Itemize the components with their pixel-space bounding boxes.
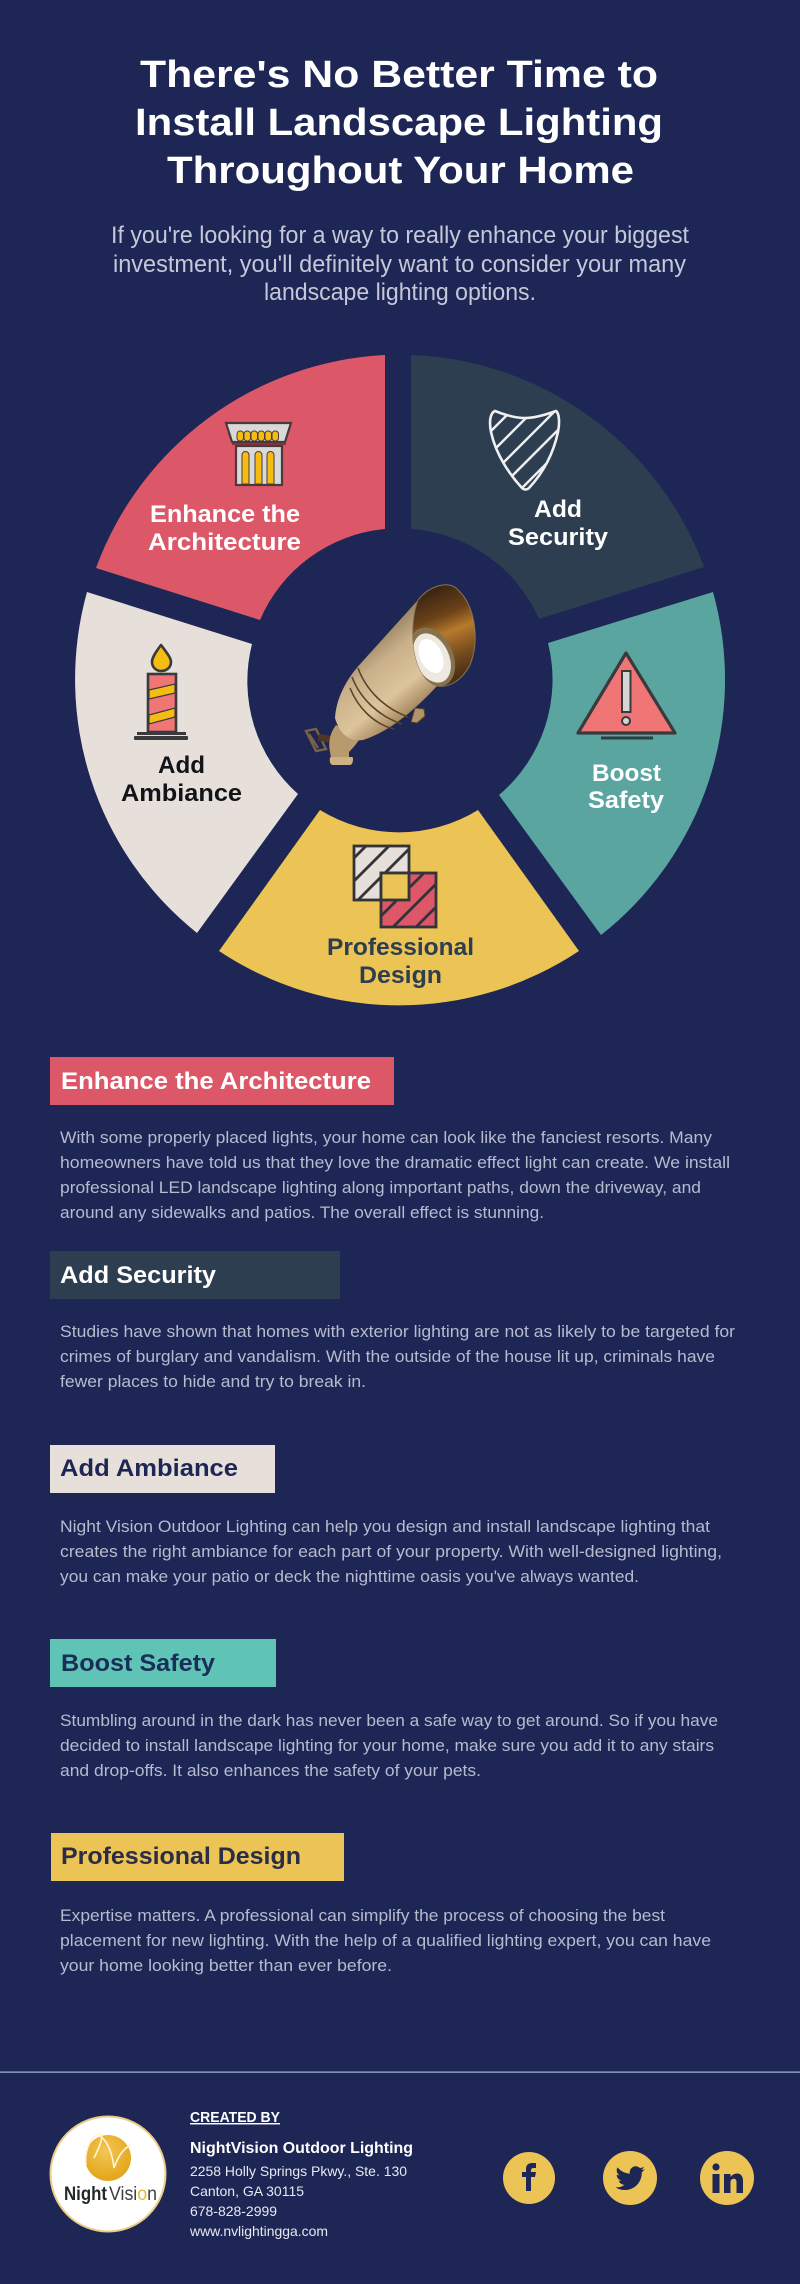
credits: www.nvlightingga.com [189,2223,328,2239]
credits: NightVision Outdoor Lighting [190,2140,413,2157]
label: enhance the architecture [148,501,301,556]
heading bar: Professional Design [61,1843,301,1870]
label: enhance the architecture: Architecture [148,529,301,556]
paragraph [60,1129,730,1222]
icon: column [226,423,291,485]
credits: CREATED BY [190,2110,280,2126]
paragraph: around any sidewalks and patios. The overall effect is stunning. [60,1204,544,1222]
segment: add ambiance [75,592,298,933]
label: add security: Security [508,524,609,551]
heading bar [50,1445,275,1493]
segment: professional design [219,810,579,1005]
icon: shield [488,410,560,491]
paragraph: fewer places to hide and try to break in. [60,1373,366,1391]
paragraph: professional LED landscape lighting along important paths, down the driveway, and [60,1179,701,1197]
label: boost safety: Safety [588,787,665,814]
paragraph: placement for new lighting. With the help of a qualified lighting expert, you can have [60,1932,711,1950]
logo: Night Vision [50,2116,166,2232]
title: There's No Better Time to [140,54,658,96]
paragraph: decided to install landscape lighting for your home, make sure you add it to any stairs [60,1737,714,1755]
heading bar [51,1833,344,1881]
label: professional design: Design [359,962,442,989]
paragraph [60,1712,718,1780]
icon: warning triangle [578,653,675,740]
image: brass landscape spotlight [306,585,475,765]
heading bar: Enhance the Architecture [61,1068,371,1095]
intro text: If you're looking for a way to really enhance your biggest [111,222,689,249]
icon: facebook [503,2152,555,2204]
paragraph: With some properly placed lights, your home can look like the fanciest resorts. Many [60,1129,713,1147]
paragraph: Studies have shown that homes with exterior lighting are not as likely to be targeted for [60,1323,736,1341]
paragraph: your home looking better than ever before. [60,1957,392,1975]
section: enhance the architecture [50,1057,730,1222]
section: add security [50,1251,736,1391]
paragraph: creates the right ambiance for each part of your property. With well-designed lighting, [60,1543,722,1561]
heading bar: Add Security [60,1262,217,1289]
segment: boost safety [499,592,725,935]
paragraph [60,1518,722,1586]
section: boost safety [50,1639,718,1780]
segment: enhance the architecture [96,355,385,620]
heading bar: Boost Safety [61,1650,216,1677]
icon: overlapping squares [352,844,438,928]
paragraph: Expertise matters. A professional can simplify the process of choosing the best [60,1907,665,1925]
logo: Night Vision: Vision [109,2184,157,2205]
paragraph [60,1323,736,1391]
credits: 678-828-2999 [190,2203,277,2219]
credits [189,2110,413,2239]
logo: Night Vision: Night [64,2184,108,2205]
footer [50,2110,754,2239]
title [135,54,663,192]
paragraph: you can make your patio or deck the nighttime oasis you've always wanted. [60,1568,639,1586]
label: enhance the architecture: Enhance the [150,501,300,528]
intro text [111,222,689,306]
label: boost safety [588,760,665,814]
intro text: landscape lighting options. [264,279,536,306]
heading bar [50,1057,394,1105]
section: add ambiance [50,1445,722,1586]
credits: 2258 Holly Springs Pkwy., Ste. 130 [190,2163,407,2179]
label: add ambiance [121,752,242,807]
paragraph: Stumbling around in the dark has never been a safe way to get around. So if you have [60,1712,718,1730]
label: add ambiance: Add [158,752,205,779]
icon: candle [134,645,188,740]
label: add ambiance: Ambiance [121,780,242,807]
icon: linkedin [700,2151,754,2205]
paragraph [60,1907,711,1975]
label: add security [508,496,609,551]
paragraph: Night Vision Outdoor Lighting can help you design and install landscape lighting that [60,1518,710,1536]
paragraph: homeowners have told us that they love the dramatic effect light can create. We install [60,1154,730,1172]
section: professional design [51,1833,711,1975]
donut chart [75,355,725,1005]
heading bar: Add Ambiance [60,1455,238,1482]
paragraph: crimes of burglary and vandalism. With the outside of the house lit up, criminals have [60,1348,715,1366]
title: Throughout Your Home [167,150,634,192]
icon: twitter [603,2151,657,2205]
title: Install Landscape Lighting [135,102,663,144]
segment: add security [411,355,704,619]
label: professional design: Professional [327,934,474,961]
paragraph: and drop-offs. It also enhances the safety of your pets. [60,1762,481,1780]
credits: Canton, GA 30115 [190,2183,304,2199]
label: add security: Add [534,496,582,523]
label: professional design [327,934,474,989]
label: boost safety: Boost [592,760,661,787]
intro text: investment, you'll definitely want to consider your many [113,251,686,278]
heading bar [50,1639,276,1687]
heading bar [50,1251,340,1299]
